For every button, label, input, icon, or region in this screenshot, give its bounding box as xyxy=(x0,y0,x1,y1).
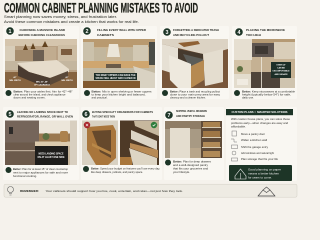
heading 1: BEFORE CHECKING CLEARANCES xyxy=(18,33,65,37)
custom plans header: CUSTOM PLANS = SMARTER SOLUTIONS xyxy=(232,110,288,114)
custom plans intro: affordable. xyxy=(231,124,246,128)
callout: good planning: means a better kitchen xyxy=(248,172,280,176)
heading 6: BUYING SPECIALTY ORGANIZERS FOR CABINETS xyxy=(92,110,153,114)
heading 5 xyxy=(17,110,73,118)
better tip 5: functional cooking. xyxy=(13,174,37,178)
photo: microwave xyxy=(234,39,295,88)
intro text: Smart planning now saves money, stress, and frustration later. xyxy=(4,15,117,19)
heading 5: LEAVING NO LANDING SPACE NEXT TO xyxy=(17,110,69,114)
custom plans intro: With custom house plans, you can solve these xyxy=(231,117,291,121)
better tip 5: next to major appliances for safe and more xyxy=(13,170,69,174)
heading 3: AND RECYCLING PULLOUT xyxy=(173,33,209,37)
better tip 3: close to your main prep area for easy xyxy=(170,92,221,96)
photo: specialty organizer xyxy=(82,120,118,165)
heading 2: FILLING EVERY WALL WITH UPPER xyxy=(97,28,147,32)
solutions list: Add windows and natural light xyxy=(241,151,274,155)
heading 1: CHOOSING A MASSIVE ISLAND xyxy=(20,28,66,32)
better tip 5: Better: Plan for at least 15" of clear countertop xyxy=(13,167,68,171)
callout: microwave height: AND UNSAFE xyxy=(274,73,288,76)
better tip 2: Better: Mix in open shelving or fewer uppers xyxy=(92,90,152,94)
better tip 6: Better: Spend your budget on features you'll use every day, xyxy=(91,166,160,170)
solutions list: Plan storage that fits your life xyxy=(241,157,279,161)
remember text: Your cabinets should support how you live, cook, entertain, and relax—not just how they look. xyxy=(46,189,183,193)
better tip 1 xyxy=(6,90,73,100)
photo: kitchen island: MIN. WIDTH xyxy=(61,80,73,82)
number badge 6: 6 xyxy=(84,112,88,118)
solutions list: Move a pantry door xyxy=(241,132,265,136)
callout: landing space: ON AT LEAST ONE SIDE xyxy=(38,156,65,159)
panel: mistake 7 xyxy=(164,107,224,180)
icon: lightbulb xyxy=(8,186,14,195)
heading 7 xyxy=(176,109,207,118)
callout: microwave height: CAN BE xyxy=(277,66,285,70)
heading 6 xyxy=(92,110,153,118)
heading 7: AND PANTRY STORAGE xyxy=(176,114,205,118)
photo: trash pullout xyxy=(162,39,228,88)
callout: landing space: NEED LANDING SPACE xyxy=(38,152,64,156)
panel: mistake 6 xyxy=(81,107,162,180)
better tip 7: Better: Plan for deep drawers xyxy=(173,160,212,164)
better tip 4: daily use. xyxy=(242,96,254,100)
solutions list xyxy=(241,132,279,161)
heading 2: CABINETS xyxy=(97,33,114,37)
custom plans intro xyxy=(231,117,291,128)
callout: microwave height xyxy=(271,62,291,78)
heading 4 xyxy=(246,28,285,37)
callout: microwave height: OVER 54" xyxy=(276,64,286,66)
photo: pantry drawers xyxy=(165,121,222,158)
callout: uppers: TOO MANY UPPERS CAN MAKE THE xyxy=(96,74,136,77)
remember text: REMEMBER: xyxy=(20,189,39,193)
better tip 7: that fits your groceries and xyxy=(173,166,209,170)
panel: mistake 1 xyxy=(3,26,79,100)
heading 5: REFRIGERATOR, RANGE, OR WALL OVEN xyxy=(17,114,73,118)
photo: kitchen island: MIN. 42"–48" xyxy=(36,80,48,84)
photo: kitchen island: MIN. WIDTH xyxy=(9,80,21,82)
better tip 3 xyxy=(162,90,221,100)
number badge 5: 5 xyxy=(8,112,12,118)
callout: microwave height: UNCOMFORTABLE xyxy=(272,70,290,72)
callout: good planning xyxy=(229,165,292,181)
heading 3 xyxy=(173,28,219,37)
photo: upper cabinets xyxy=(83,39,155,88)
heading 6: THAT DON'T NEED THEM xyxy=(92,114,115,118)
better tip 2: and practical. xyxy=(92,96,108,100)
photo: kitchen island: 42" xyxy=(13,76,17,79)
better tip 3: cleanup and a cleaner kitchen. xyxy=(170,96,206,100)
icon: right mark xyxy=(151,122,157,128)
number badge 3: 3 xyxy=(166,30,168,36)
remember bar xyxy=(4,184,297,197)
solutions list: Widen a kitchen wall xyxy=(241,138,267,142)
callout: uppers: SPACE FEEL HEAVY AND CLOSED IN xyxy=(96,77,136,80)
callout: good planning: Good planning on paper xyxy=(248,168,281,172)
better tip 5 xyxy=(6,167,69,178)
better tip 4: height (typically below 54") for safe, xyxy=(242,92,291,96)
better tip 1: doors and seating zones. xyxy=(14,96,46,100)
number badge 7: 7 xyxy=(168,113,170,119)
better tip 3: Better: Place a trash and recycling pullout xyxy=(170,90,220,94)
better tip 4: Better: Keep microwaves at a comfortable xyxy=(242,90,296,94)
photo: fridge landing space xyxy=(5,120,77,165)
photo: kitchen island: OF CLEARANCE xyxy=(34,84,51,86)
callout: good planning: for years to come. xyxy=(248,176,272,180)
better tip 6: like deep drawers, pullouts, and pantry space. xyxy=(91,170,143,174)
number badge 4: 4 xyxy=(238,30,240,36)
better tip 2: to keep your kitchen bright and balanced, xyxy=(92,92,146,96)
intro text: Avoid these common mistakes and create a kitchen that works for real life. xyxy=(4,20,139,24)
intro text xyxy=(4,15,139,24)
heading 3: FORGETTING A DEDICATED TRASH xyxy=(173,28,219,32)
better tip 4 xyxy=(234,90,296,100)
number badge 2: 2 xyxy=(86,29,88,35)
better tip 1: clear around the island, and check appliance xyxy=(14,92,66,96)
heading 7: SKIPPING USEFUL DRAWERS xyxy=(176,109,207,113)
photo: deep drawers xyxy=(120,120,159,165)
callout: uppers xyxy=(94,73,137,80)
better tip 1: Better: Plan your aisles first. Aim for 42"–48" xyxy=(14,90,73,94)
panel: custom plans xyxy=(226,107,297,181)
panel: mistake 4 xyxy=(232,26,297,100)
number badge 1: 1 xyxy=(8,29,12,35)
custom plans intro: problems early—when changes are easy and xyxy=(231,121,289,125)
panel: mistake 3 xyxy=(160,26,229,100)
heading 4: PLACING THE MICROWAVE xyxy=(246,28,285,32)
solutions list: Shift the garage entry xyxy=(241,145,269,149)
panel: mistake 5 xyxy=(3,107,79,180)
better tip 6 xyxy=(83,166,160,174)
callout: landing space xyxy=(38,152,65,159)
better tip 7: your lifestyle. xyxy=(173,170,190,174)
heading 2 xyxy=(97,28,147,37)
panel: mistake 2 xyxy=(81,26,157,100)
better tip 7: and a well-designed pantry xyxy=(173,163,209,167)
icon: wrong mark xyxy=(84,122,90,128)
list icons xyxy=(231,131,238,161)
photo: kitchen island xyxy=(5,39,77,88)
icon: houses logo xyxy=(258,187,275,196)
heading 4: TOO HIGH xyxy=(246,33,261,37)
photo: kitchen island: 42" xyxy=(65,76,69,79)
heading 1 xyxy=(18,28,66,37)
better tip 2 xyxy=(84,90,152,100)
better tip 7 xyxy=(165,160,212,174)
